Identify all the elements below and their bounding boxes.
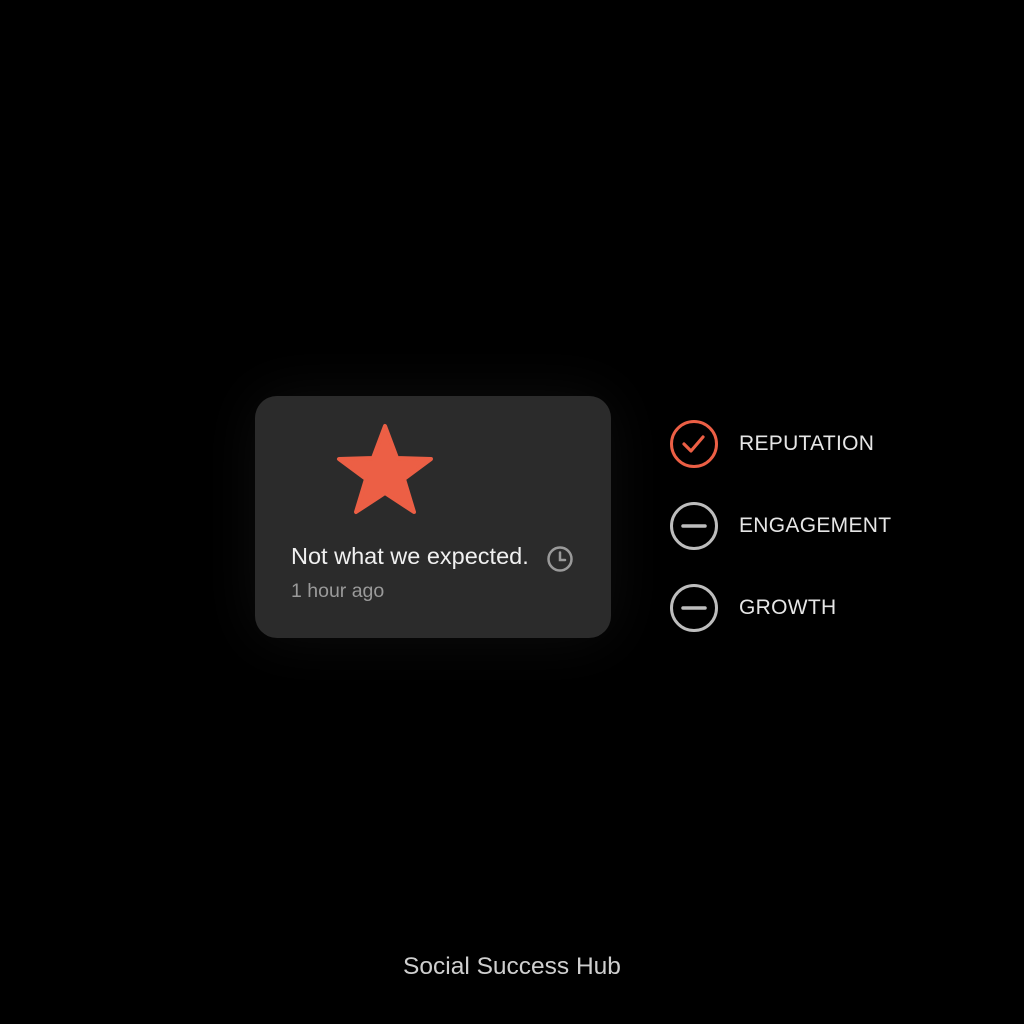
icon: star [336,424,433,514]
status: reputation: REPUTATION [739,432,874,455]
status: engagement [670,502,891,550]
status: growth [670,584,836,632]
status: reputation [670,420,874,468]
review text: Not what we expected. [291,543,529,569]
icon: minus circle [670,584,718,632]
icon: minus circle [670,502,718,550]
timestamp: 1 hour ago [291,580,384,602]
footer brand: Social Success Hub [403,953,621,980]
status: engagement: ENGAGEMENT [739,514,891,537]
icon: check circle [670,420,718,468]
status: growth: GROWTH [739,596,836,619]
icon: clock [547,546,573,572]
review card [255,396,611,638]
